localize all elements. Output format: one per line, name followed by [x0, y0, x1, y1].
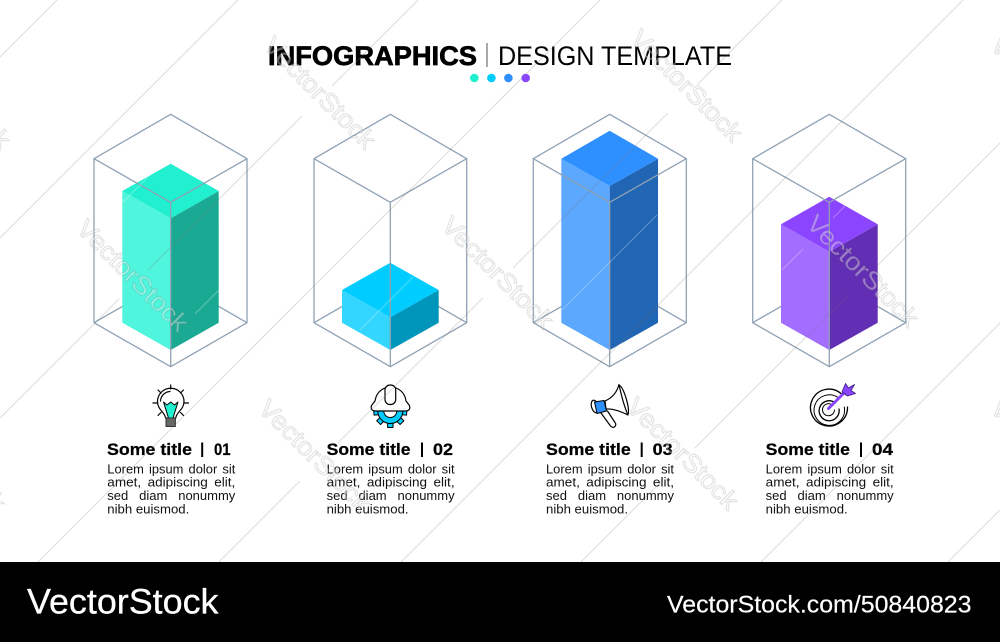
item text 2: Lorem ipsum dolor sit: [327, 462, 455, 476]
item text 2: amet, adipiscing elit,: [327, 476, 455, 490]
item text 4: sed diam nonummy: [766, 489, 894, 503]
item text 4: [766, 462, 894, 516]
item text 3: [546, 462, 675, 516]
watermarks: VectorStock: [801, 209, 924, 333]
item title 3: Some title: [546, 440, 631, 459]
title: DESIGN TEMPLATE: [498, 41, 732, 71]
item title 1: 01: [214, 440, 230, 459]
item title 3: 03: [653, 440, 673, 459]
footer bar: VectorStock.com/50840823: [667, 592, 972, 618]
icon: helmet and gear: [371, 385, 410, 428]
item title 3: [546, 440, 673, 459]
watermarks: VectorStock: [258, 31, 381, 155]
item text 1: sed diam nonummy: [107, 489, 236, 503]
item title 1: [107, 440, 230, 459]
item title 4: 04: [872, 440, 894, 459]
item text 4: Lorem ipsum dolor sit: [766, 462, 894, 476]
panel: column 1: [94, 114, 247, 516]
item title 2: [327, 440, 453, 459]
item text 3: nibh euismod.: [546, 502, 628, 516]
title dots: [470, 74, 530, 82]
watermarks: VectorStock: [71, 214, 194, 338]
bar 4 purple: [781, 197, 878, 350]
footer bar: [0, 562, 1000, 642]
bar 1 teal: [122, 164, 219, 350]
item text 3: amet, adipiscing elit,: [546, 476, 674, 490]
item title 4: [766, 440, 894, 459]
watermarks: VectorStock: [625, 24, 748, 148]
panel: column 4: [753, 114, 906, 516]
panel: column 3: [533, 114, 686, 516]
item title 2: Some title: [327, 440, 411, 459]
icon: target with arrow: [811, 384, 856, 426]
footer bar: VectorStock: [27, 582, 219, 622]
item text 2: nibh euismod.: [327, 502, 409, 516]
item text 1: nibh euismod.: [107, 502, 189, 516]
item text 4: nibh euismod.: [766, 502, 848, 516]
panel: column 2: [314, 114, 467, 516]
item text 1: amet, adipiscing elit,: [107, 476, 235, 490]
item text 3: sed diam nonummy: [546, 489, 675, 503]
item text 1: [107, 462, 236, 516]
item title 4: Some title: [766, 440, 850, 459]
bar 3 blue: [561, 131, 658, 350]
item text 2: sed diam nonummy: [327, 489, 455, 503]
item text 2: [327, 462, 455, 516]
title: INFOGRAPHICS: [268, 41, 477, 71]
icon: megaphone: [590, 384, 631, 427]
icon: light bulb: [153, 385, 188, 426]
watermarks: [0, 24, 1000, 518]
item title 1: Some title: [107, 440, 192, 459]
item text 3: Lorem ipsum dolor sit: [546, 462, 675, 476]
watermarks: VectorStock: [436, 211, 559, 335]
watermarks: VectorStock: [621, 392, 744, 516]
watermarks: VectorStock: [253, 394, 376, 518]
item title 2: 02: [433, 440, 453, 459]
title: [268, 41, 732, 71]
bar 2 cyan: [342, 263, 439, 350]
item text 4: amet, adipiscing elit,: [766, 476, 894, 490]
item text 1: Lorem ipsum dolor sit: [107, 462, 236, 476]
